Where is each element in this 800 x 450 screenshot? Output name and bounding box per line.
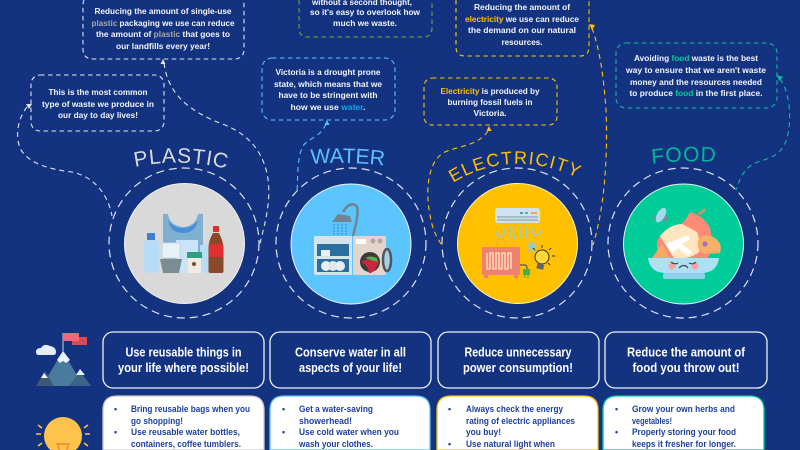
panel: water tips: • [282, 404, 285, 414]
callout: food waste: way to ensure that we aren't waste [625, 65, 766, 75]
panel: food tips: • [615, 427, 618, 437]
heading: electricity action [438, 332, 599, 388]
callout: plastic packaging: Reducing the amount of single-use [94, 6, 232, 16]
panel: food tips: • [615, 404, 618, 414]
callout: water drought: state, which means that we [274, 79, 382, 89]
heading: food action [605, 332, 767, 388]
title: plastic: PLASTIC [134, 148, 228, 168]
panel: water tips: wash your clothes. [298, 439, 373, 449]
callout: water drought: Victoria is a drought prone [276, 67, 381, 77]
panel: food tips: keeps it fresher for longer. [632, 439, 736, 449]
panel: electricity tips: you buy! [466, 427, 501, 437]
callout: water drought: have to be stringent with [278, 90, 378, 100]
panel: electricity tips: • [448, 439, 451, 449]
heading: water action [270, 332, 431, 388]
callout: overlooked water waste [299, 0, 432, 37]
callout: most common waste: type of waste we produce in [42, 99, 154, 109]
callout: water drought: how we use water. [290, 102, 365, 112]
callout: overlooked water waste: much we waste. [333, 18, 397, 28]
panel: electricity circle [442, 168, 592, 318]
panel: electricity tips: rating of electric appliances [466, 416, 575, 426]
panel: plastic tips: containers, coffee tumblers. [131, 439, 241, 449]
heading: water action: Conserve water in all [295, 346, 406, 360]
panel: electricity tips: Use natural light when [466, 439, 555, 449]
callout: electricity demand: electricity we use can reduce [465, 14, 579, 24]
callout: plastic packaging [83, 0, 244, 59]
panel: plastic tips: • [114, 427, 117, 437]
callout: food waste: money and the resources needed [630, 77, 762, 87]
panel: plastic tips: Bring reusable bags when you [131, 404, 250, 414]
panel: food tips: vegetables! [632, 416, 672, 426]
panel: food tips: Grow your own herbs and [632, 404, 735, 414]
panel: water tips: Use cold water when you [299, 427, 399, 437]
callout: electricity fossil fuels [424, 78, 557, 125]
heading: plastic action: Use reusable things in [126, 346, 242, 360]
callout: plastic packaging: our landfills every year! [116, 41, 210, 51]
heading: plastic action: your life where possible! [118, 361, 249, 375]
callout: electricity fossil fuels: Victoria. [474, 108, 506, 118]
title: water: WATER [310, 148, 384, 166]
panel: electricity tips: Always check the energy [466, 404, 563, 414]
panel: water tips [270, 396, 430, 450]
panel: electricity tips [437, 396, 598, 450]
heading: plastic action [103, 332, 264, 388]
connector: food fact [736, 75, 790, 190]
connector: water fact [297, 120, 330, 191]
callout: overlooked water waste: so it's easy to overlook how [310, 7, 420, 17]
icon: food scraps in bowl [648, 206, 721, 279]
panel: plastic tips: • [114, 404, 117, 414]
panel: plastic tips: go shopping! [131, 416, 183, 426]
callout: water drought [262, 58, 395, 120]
connector: electricity fact 2 [589, 24, 606, 245]
callout: plastic packaging: the amount of plastic that goes to [96, 29, 230, 39]
connector: electricity fact 1 [428, 126, 492, 244]
callout: electricity fossil fuels: burning fossil fuels in [448, 97, 532, 107]
heading: food action: Reduce the amount of [627, 346, 746, 360]
callout: electricity demand [456, 0, 589, 56]
callout: food waste: to produce food in the first place. [630, 88, 762, 98]
callout: electricity fossil fuels: Electricity is produced by [440, 86, 540, 96]
panel: food tips: Properly storing your food [632, 427, 736, 437]
title: food: FOOD [652, 146, 715, 164]
callout: electricity demand: Reducing the amount of [474, 2, 570, 12]
panel: water tips: Get a water-saving [299, 404, 373, 414]
heading: food action: food you throw out! [632, 361, 740, 375]
callout: most common waste: our day to day lives! [58, 110, 138, 120]
callout: electricity demand: resources. [502, 37, 542, 47]
connector: plastic fact 2 [160, 59, 269, 244]
callout: most common waste: This is the most common [48, 87, 148, 97]
panel: food circle [608, 168, 758, 318]
panel: plastic tips: Use reusable water bottles, [131, 427, 240, 437]
panel: water tips: showerhead! [299, 416, 352, 426]
heading: electricity action: Reduce unnecessary [464, 346, 572, 360]
panel: plastic circle [109, 168, 259, 318]
callout: food waste: Avoiding food waste is the best [634, 53, 758, 63]
heading: electricity action: power consumption! [463, 361, 573, 375]
callout: food waste [616, 43, 777, 108]
icon: light bulb [36, 417, 90, 450]
icon: mountain with flag [36, 333, 91, 386]
callout: plastic packaging: plastic packaging we use can reduce [92, 18, 235, 28]
icon: plastic items [144, 214, 224, 273]
heading: water action: aspects of your life! [299, 361, 402, 375]
title: electricity: ELECTRICITY [448, 151, 582, 182]
connector: plastic fact 1 [18, 104, 112, 216]
callout: most common waste [31, 75, 164, 131]
panel: food tips [603, 396, 764, 450]
panel: water circle [276, 168, 426, 318]
callout: electricity demand: the demand on our natural [468, 25, 576, 35]
icon: shower and appliances [314, 204, 391, 275]
icon: appliances [482, 208, 555, 278]
panel: plastic tips [103, 396, 264, 450]
panel: electricity tips: • [448, 404, 451, 414]
panel: water tips: • [282, 427, 285, 437]
